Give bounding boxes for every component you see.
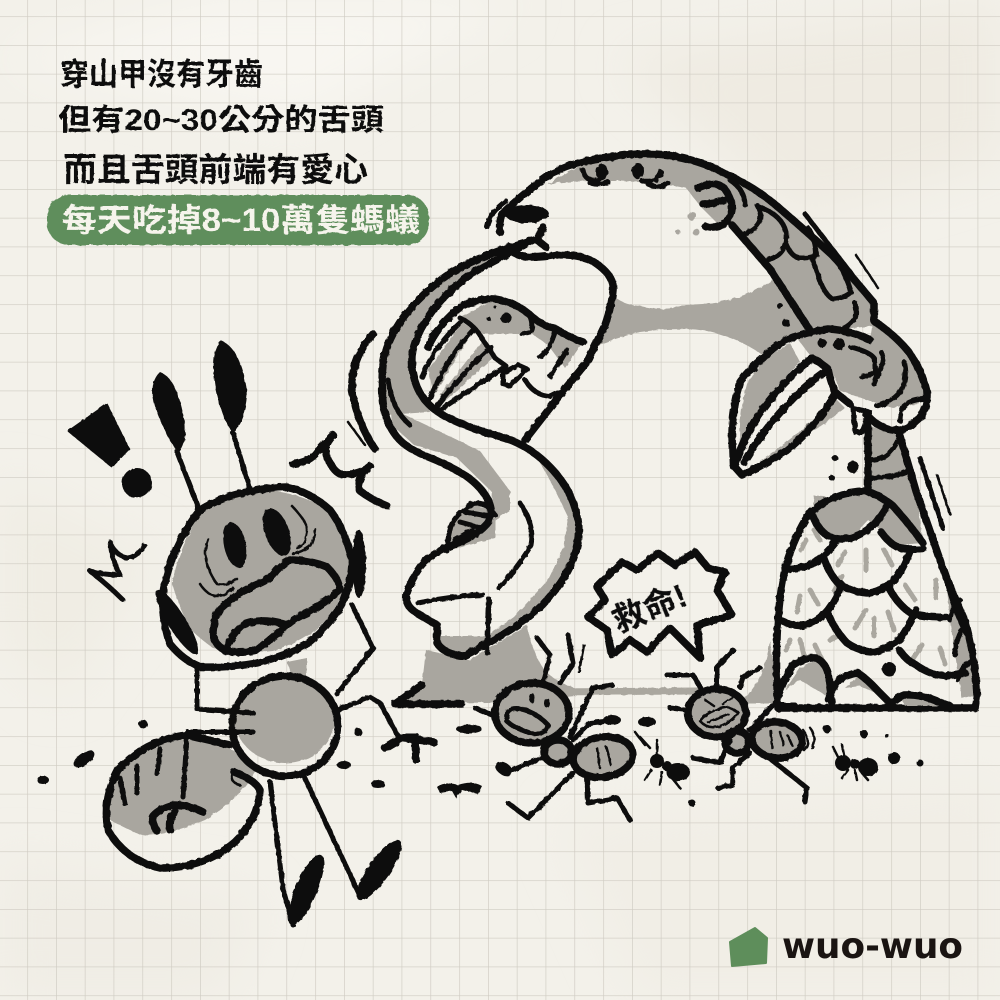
ant two outlines — [688, 689, 804, 761]
ant neck gray — [287, 658, 307, 678]
base ink — [395, 685, 462, 704]
ant thorax gray — [235, 675, 335, 763]
thorax outline — [232, 676, 338, 776]
ant one gray parts — [496, 684, 635, 781]
lower claw gray 2 — [758, 398, 845, 462]
lower neck line — [864, 421, 872, 488]
antenna stems — [177, 433, 250, 512]
ant two stripes — [771, 731, 792, 748]
tail gray — [946, 577, 977, 699]
lower neck scales — [868, 440, 910, 478]
ground ink dots — [37, 715, 924, 806]
heading line 2: 但有20~30公分的舌頭 — [58, 104, 384, 137]
nose motion line — [487, 201, 506, 227]
heading line 3: 而且舌頭前端有愛心 — [63, 151, 368, 188]
eyes — [219, 504, 297, 570]
arm claw gray — [428, 322, 496, 400]
right leg arm — [340, 697, 417, 736]
arm claw lines — [422, 318, 506, 412]
neck inner line — [732, 225, 809, 329]
arm scales — [522, 314, 567, 376]
logo house icon — [730, 928, 767, 966]
right hand blob — [385, 738, 434, 760]
tongue leaf gray — [447, 504, 495, 551]
pangolin drawing — [348, 154, 977, 708]
ant head gray — [172, 490, 352, 652]
eyes and brows — [583, 163, 668, 187]
ant one hand — [493, 759, 515, 779]
arm jaw curve — [525, 380, 558, 396]
antennae tips — [152, 341, 247, 452]
tongue right band gray — [437, 447, 583, 656]
heading line 1: 穿山甲沒有牙齒 — [60, 57, 263, 92]
tongue tip nick — [537, 227, 546, 247]
arm dots — [487, 306, 512, 324]
right back outline — [900, 436, 977, 708]
nose — [505, 205, 549, 223]
ant one — [475, 635, 635, 820]
ant one outlines — [495, 683, 635, 781]
shell humps — [785, 660, 948, 706]
ant one sweat — [579, 645, 584, 672]
mouth — [213, 560, 340, 652]
ant two gray parts — [689, 690, 804, 761]
lower neck gray — [812, 425, 923, 545]
drip tooth — [853, 408, 870, 432]
shell dome outline — [776, 491, 923, 706]
small black ants — [635, 732, 878, 788]
bubble outline — [588, 552, 732, 658]
arch wall shadow — [594, 279, 809, 358]
bubble text: 救命! — [607, 576, 692, 639]
motion lines by back — [920, 458, 943, 528]
arm tooth — [503, 365, 527, 386]
lower head top — [740, 329, 870, 382]
tongue left band gray — [390, 400, 510, 520]
highlight pill: daily ants eaten — [47, 195, 429, 245]
abdomen details — [120, 736, 187, 804]
tongue base shadow — [395, 625, 575, 704]
raised hands — [149, 530, 366, 659]
head underside — [514, 253, 613, 440]
head and neck gray — [548, 154, 874, 330]
gray shadows behind the pangolin — [395, 279, 809, 704]
arm top arc — [428, 299, 583, 347]
abdomen hook — [152, 805, 203, 831]
tail scales — [946, 577, 972, 680]
lower claws — [732, 358, 850, 475]
body top outline — [500, 154, 927, 430]
ant two face — [700, 697, 738, 727]
ant two — [667, 650, 815, 802]
tongue outline — [382, 240, 579, 656]
lower head scales — [851, 347, 923, 421]
leg right — [303, 774, 360, 896]
small ant two — [833, 745, 878, 780]
tongue inner lines — [388, 380, 532, 653]
eye curves — [200, 506, 315, 596]
abdomen outline — [106, 735, 260, 868]
left motion lines — [352, 334, 375, 449]
shell gray stripes — [786, 530, 945, 664]
small tail nub — [232, 770, 240, 785]
ant two limbs — [667, 650, 807, 802]
neck scales — [730, 180, 856, 330]
pangolin gray fills — [383, 154, 977, 699]
feet — [281, 834, 409, 929]
ant two motion lines — [803, 728, 815, 750]
logo — [730, 926, 963, 967]
ground band shadow — [540, 691, 700, 692]
ground line — [778, 704, 975, 712]
heading text — [58, 57, 384, 188]
shell dot — [882, 662, 896, 676]
squiggle right — [293, 435, 387, 506]
shell scales — [782, 503, 965, 676]
squiggle left — [90, 542, 145, 600]
lower claw gray 1 — [740, 343, 800, 445]
ant one limbs — [475, 635, 630, 820]
gray ink dots — [676, 212, 700, 236]
right ground shadow — [740, 640, 778, 703]
logo wordmark: wuo-wuo — [782, 926, 963, 967]
green pill background — [47, 195, 429, 245]
big ant — [67, 341, 434, 929]
ant abdomen gray — [110, 738, 257, 835]
left arm lines — [188, 670, 253, 732]
arm gray — [462, 299, 583, 368]
right arm — [337, 605, 373, 694]
tongue upper gray — [383, 240, 533, 415]
lower head gray — [797, 315, 927, 408]
speech bubble — [588, 552, 732, 658]
lower head nub — [740, 369, 755, 380]
exclamation mark — [67, 403, 152, 498]
pill text: 每天吃掉8~10萬隻螞蟻 — [62, 202, 420, 238]
ear — [698, 184, 732, 228]
head outline — [162, 487, 352, 667]
tongue leaf — [447, 503, 495, 551]
motion lines by neck — [805, 214, 874, 303]
shell foot humps — [776, 658, 950, 706]
ant one face — [506, 693, 550, 734]
small ant one — [635, 732, 690, 788]
ant one stripes — [597, 747, 611, 768]
head dots — [777, 303, 859, 481]
leg left — [270, 782, 293, 925]
